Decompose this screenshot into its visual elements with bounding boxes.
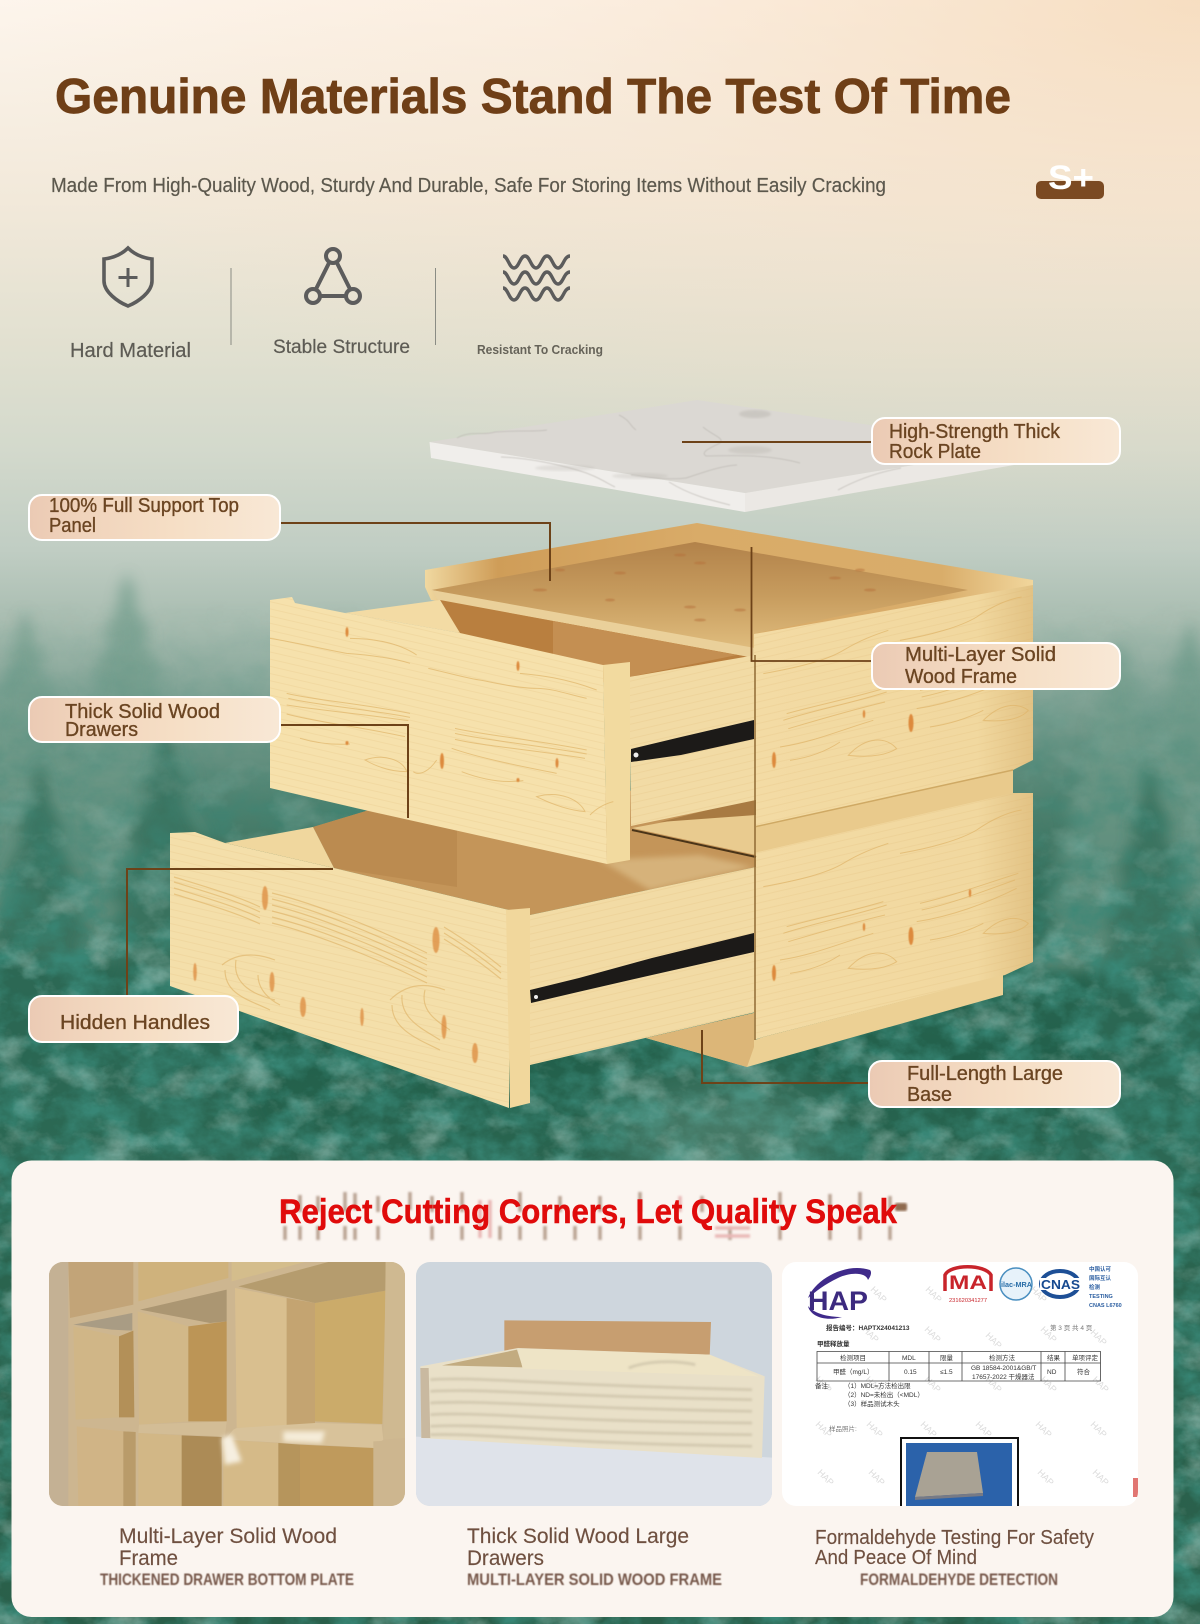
- notes: （1）MDL=方法检出限: [844, 1381, 911, 1390]
- report header: 甲醛释放量: [817, 1339, 850, 1348]
- grade badge: S+: [1048, 159, 1094, 197]
- MA mark: MA: [949, 1273, 987, 1294]
- caption: large drawers: Thick Solid Wood Large: [467, 1525, 689, 1548]
- accreditation text: 中国认可: [1089, 1265, 1112, 1273]
- test results table: GB 18584-2001&GB/T: [971, 1365, 1036, 1372]
- watermarks: HAP: [1034, 1419, 1054, 1440]
- watermarks: HAP: [1039, 1324, 1059, 1345]
- callout: thick solid wood drawers: [29, 697, 280, 742]
- report header: 报告编号：HAPTX24041213: [826, 1323, 910, 1332]
- CNAS mark: [1040, 1271, 1082, 1297]
- callout: multi-layer solid wood frame: Multi-Layer Solid: [905, 644, 1056, 666]
- CNAS mark: CNAS: [1041, 1277, 1080, 1292]
- caption: formaldehyde testing: FORMALDEHYDE DETECTION: [860, 1570, 1058, 1589]
- test results table: ≤1.5: [940, 1369, 953, 1376]
- caption: multi-layer frame: THICKENED DRAWER BOTTOM PLATE: [100, 1570, 354, 1589]
- watermarks: HAP: [919, 1419, 939, 1440]
- photo: formaldehyde test report: [782, 1262, 1138, 1508]
- watermarks: HAP: [864, 1374, 884, 1395]
- callout: high-strength thick rock plate: [872, 418, 1120, 464]
- notes: 样品照片:: [829, 1424, 857, 1433]
- feature: stable structure: Stable Structure: [273, 337, 410, 358]
- accreditation text: CNAS L6760: [1089, 1303, 1122, 1309]
- test results table: 限量: [940, 1353, 954, 1362]
- callout: multi-layer solid wood frame: [872, 643, 1120, 689]
- callout: thick solid wood drawers: Thick Solid Wood: [65, 701, 220, 723]
- drawer cavity backing: [440, 595, 757, 700]
- callout: full-length large base: [869, 1061, 1120, 1107]
- test results table: 甲醛（mg/L）: [833, 1367, 873, 1376]
- watermarks: HAP: [1091, 1374, 1111, 1395]
- notes: （3）样品测试木头: [844, 1399, 900, 1408]
- callout: multi-layer solid wood frame: Wood Frame: [905, 666, 1017, 688]
- watermarks: [814, 1284, 1111, 1488]
- HAP logo: [808, 1268, 871, 1319]
- notes: [815, 1381, 924, 1433]
- upper drawer: [270, 597, 756, 864]
- test results table: 单项评定: [1072, 1353, 1098, 1362]
- watermarks: HAP: [984, 1374, 1004, 1395]
- watermarks: HAP: [1091, 1467, 1111, 1488]
- icon: waves: [503, 256, 570, 300]
- callout: thick solid wood drawers: Drawers: [65, 719, 138, 741]
- callout: 100% full support top panel: Panel: [49, 515, 96, 537]
- test results table: 17657-2022 干燥器法: [972, 1372, 1035, 1381]
- ILAC mark: ilac-MRA: [1001, 1282, 1032, 1289]
- watermarks: HAP: [865, 1419, 885, 1440]
- watermarks: HAP: [923, 1374, 943, 1395]
- feature: hard material: Hard Material: [70, 340, 191, 362]
- product: rock plate: [430, 400, 1022, 512]
- feature: resistant to cracking: Resistant To Cracking: [477, 343, 603, 357]
- panel: reject cutting corners: Reject Cutting Corners, Let Quality Speak: [279, 1193, 897, 1231]
- test results table: ND: [1047, 1369, 1057, 1376]
- stamp edge: [1133, 1478, 1138, 1497]
- ILAC mark: [1000, 1268, 1032, 1300]
- watermarks: HAP: [1039, 1374, 1059, 1395]
- test results table: 检测方法: [989, 1353, 1016, 1362]
- cabinet front edge: [754, 655, 756, 1040]
- caption: multi-layer frame: Frame: [119, 1547, 178, 1570]
- title: Genuine Materials Stand The Test Of Time: [55, 70, 1011, 124]
- callout: high-strength thick rock plate: Rock Plate: [889, 441, 981, 463]
- callout: full-length large base: Full-Length Large: [907, 1063, 1063, 1085]
- MA mark: 231620341277: [949, 1298, 987, 1304]
- test results table: 检测项目: [840, 1353, 866, 1362]
- watermarks: HAP: [861, 1324, 881, 1345]
- photo: multi-layer solid wood frame: [45, 1258, 412, 1510]
- product: nightstand with open drawers: [170, 523, 1033, 1108]
- test results table: 0.15: [904, 1369, 917, 1376]
- watermarks: HAP: [923, 1324, 943, 1345]
- notes: （2）ND=未检出（<MDL）: [844, 1390, 924, 1399]
- test results table: MDL: [902, 1355, 916, 1362]
- leader lines: [127, 442, 872, 1083]
- watermarks: HAP: [814, 1374, 834, 1395]
- caption: formaldehyde testing: Formaldehyde Testing For Safety: [815, 1527, 1094, 1549]
- test results table: 符合: [1077, 1367, 1090, 1376]
- callout: hidden handles: Hidden Handles: [60, 1012, 210, 1034]
- HAP logo: HAP: [808, 1286, 868, 1316]
- watermarks: HAP: [974, 1419, 994, 1440]
- watermarks: HAP: [984, 1330, 1004, 1351]
- watermarks: HAP: [816, 1467, 836, 1488]
- feature: stable structure: [273, 249, 410, 358]
- caption: large drawers: Drawers: [467, 1547, 544, 1570]
- callout: 100% full support top panel: 100% Full Support Top: [49, 495, 239, 517]
- callout: hidden handles: [29, 996, 238, 1042]
- caption: multi-layer frame: [100, 1525, 354, 1589]
- grade badge: [1036, 159, 1104, 199]
- watermarks: HAP: [867, 1467, 887, 1488]
- accreditation text: 国际互认: [1089, 1274, 1112, 1282]
- watermarks: HAP: [869, 1284, 889, 1305]
- panel: reject cutting corners: [12, 1160, 1174, 1617]
- accreditation text: [1089, 1265, 1122, 1309]
- watermarks: HAP: [924, 1284, 944, 1305]
- report header: [817, 1323, 1093, 1348]
- watermarks: HAP: [1036, 1467, 1056, 1488]
- shelf between drawers: [632, 798, 756, 857]
- notes: 备注:: [815, 1381, 830, 1390]
- feature: resistant to cracking: [477, 256, 603, 357]
- caption: multi-layer frame: Multi-Layer Solid Wood: [119, 1525, 337, 1548]
- feature: hard material: [70, 248, 191, 362]
- report header: 第 3 页 共 4 页: [1050, 1323, 1093, 1332]
- accreditation text: 检测: [1089, 1283, 1101, 1291]
- caption: large drawers: MULTI-LAYER SOLID WOOD FRAME: [467, 1570, 722, 1589]
- watermarks: HAP: [814, 1419, 834, 1440]
- watermarks: HAP: [1029, 1284, 1049, 1305]
- sample photo: [901, 1438, 1018, 1508]
- cabinet side upper: [754, 585, 1033, 828]
- callout: 100% full support top panel: [29, 495, 280, 540]
- callout: full-length large base: Base: [907, 1084, 952, 1106]
- cabinet base: [646, 975, 1003, 1067]
- caption: large drawers: [467, 1525, 722, 1589]
- watermarks: HAP: [1089, 1327, 1109, 1348]
- watermarks: HAP: [1089, 1419, 1109, 1440]
- callout: high-strength thick rock plate: High-Strength Thick: [889, 421, 1061, 443]
- icon: triangle nodes: [306, 249, 360, 303]
- caption: formaldehyde testing: And Peace Of Mind: [815, 1547, 977, 1569]
- accreditation text: TESTING: [1089, 1294, 1113, 1300]
- caption: formaldehyde testing: [815, 1527, 1094, 1589]
- cabinet top: [425, 523, 1033, 658]
- test results table: [817, 1352, 1100, 1381]
- cabinet side lower: [754, 768, 1033, 1040]
- subtitle: Made From High-Quality Wood, Sturdy And Durable, Safe For Storing Items Without Easily Cracking: [51, 175, 886, 197]
- test results table: 结果: [1047, 1353, 1060, 1362]
- lower drawer: [170, 790, 756, 1108]
- MA mark: [945, 1267, 991, 1304]
- icon: shield: [104, 248, 152, 306]
- photo: thick solid wood drawer: [412, 1258, 779, 1510]
